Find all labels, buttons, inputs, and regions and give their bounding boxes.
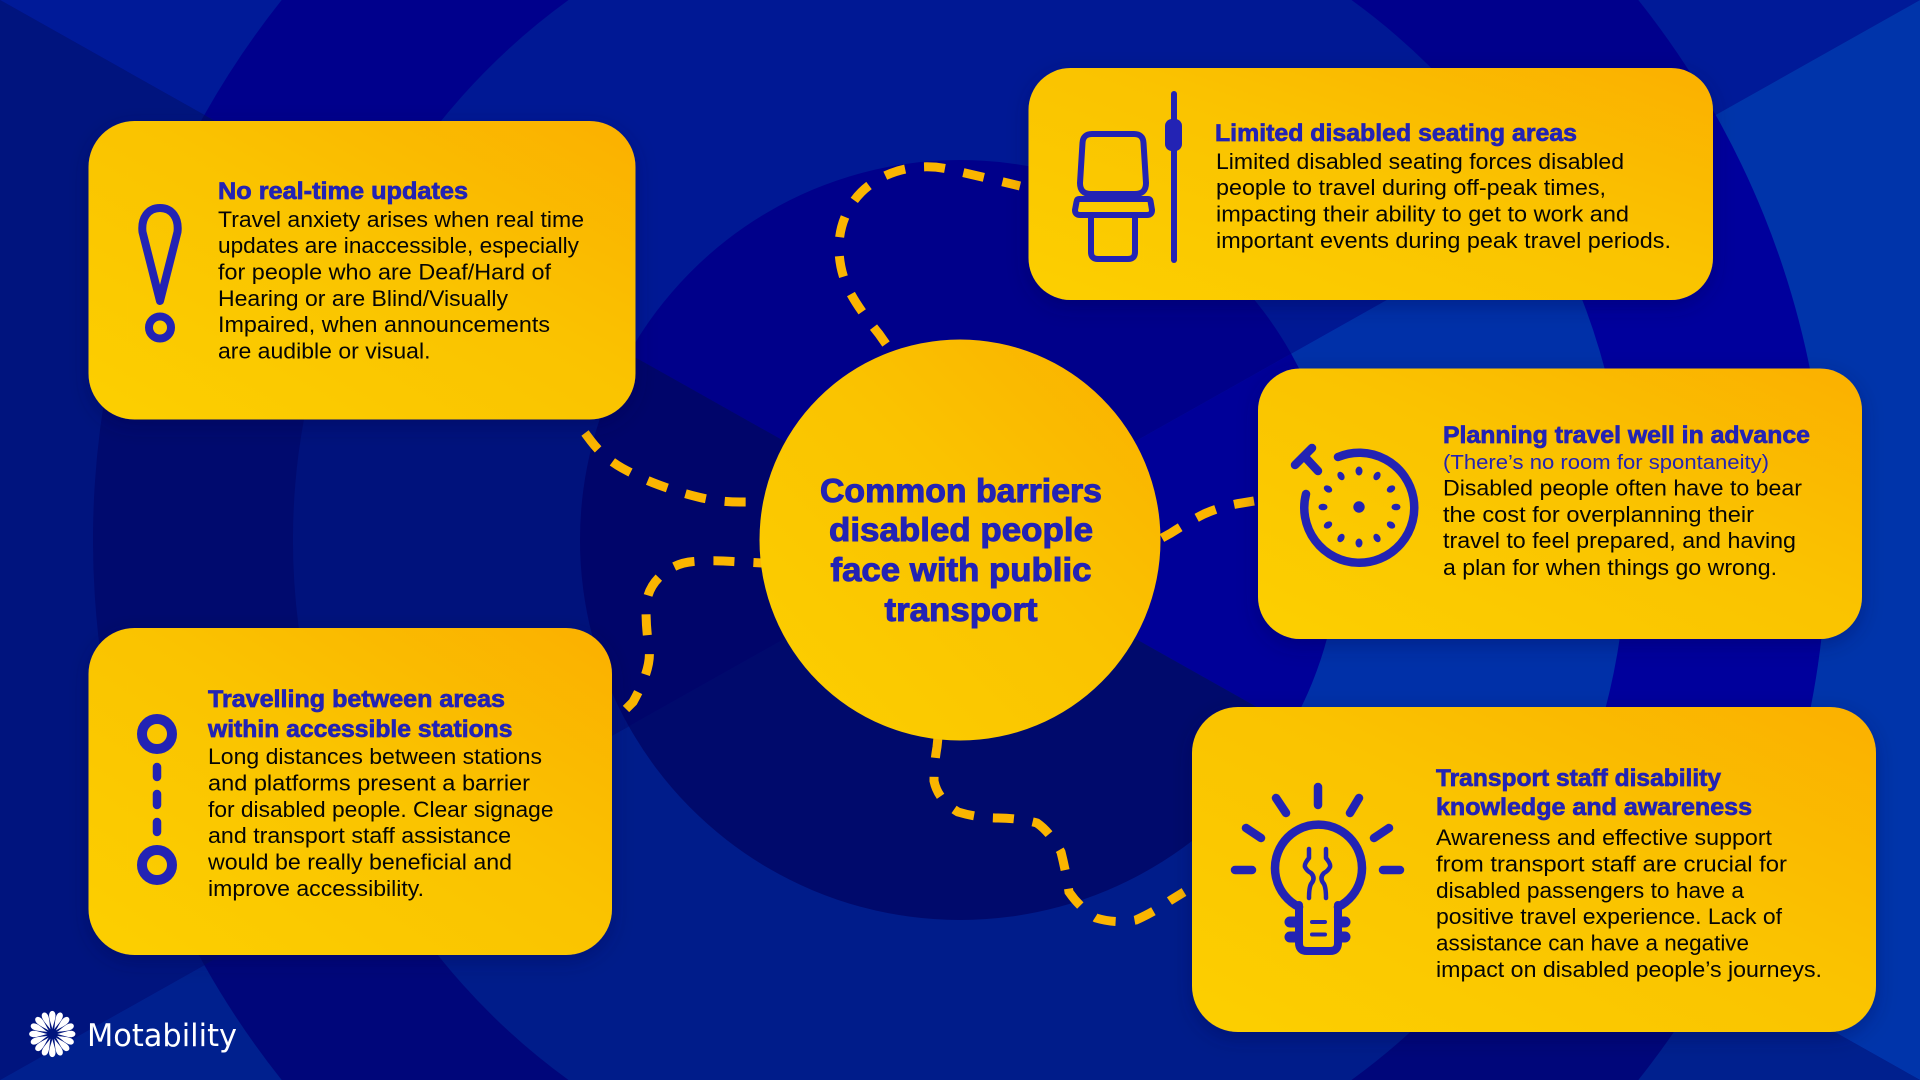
text: stations body: would be really beneficial and [207,850,512,874]
panel: transport staff awareness [1192,707,1876,1032]
text: planning body: a plan for when things go wrong. [1443,555,1777,580]
title: face with public [830,551,1092,588]
icon: flower mark [29,1011,75,1057]
text: seating body: Limited disabled seating forces disabled [1216,149,1624,174]
icon: route with two stops [142,719,172,880]
text: stations body: and platforms present a barrier [208,770,530,796]
text: stations body: Long distances between stations [208,744,542,769]
text: stations body [207,744,554,901]
dashed connector: centre to planning card [1162,501,1254,538]
heading: staff awareness: knowledge and awareness [1436,794,1752,821]
icon: light bulb [1235,787,1400,951]
text: staff body: impact on disabled people’s journeys. [1436,957,1822,982]
text: real-time updates body: for people who are Deaf/Hard of [218,260,552,284]
wordmark: Motability [87,1018,237,1054]
text: seating body: impacting their ability to get to work and [1216,202,1629,226]
text: real-time updates body: Travel anxiety arises when real time [218,207,584,232]
text: real-time updates body: are audible or visual. [218,338,430,364]
panel: no real-time updates [88,121,636,420]
title [820,472,1102,628]
text: real-time updates body: updates are inaccessible, especially [218,233,579,258]
text: stations body: for disabled people. Clear signage [208,797,554,822]
logo: Motability [29,1011,237,1057]
icon: exclamation mark [142,208,178,338]
icon: train seat and pole [1075,94,1182,260]
heading: travelling between areas: Travelling between areas [208,686,505,713]
text: planning body: Disabled people often have to bear [1443,476,1802,500]
text: stations body: and transport staff assistance [208,823,511,848]
panel: planning travel well in advance [1258,368,1862,639]
heading: no real-time updates: No real-time updates [218,178,468,205]
text: seating body: important events during peak travel periods. [1216,228,1671,253]
text: real-time updates body: Impaired, when announcements [218,312,550,337]
text: staff body: disabled passengers to have a [1436,878,1745,903]
central circle: common barriers [760,340,1160,740]
heading: travelling between areas [207,686,512,743]
title: Common barriers [820,472,1102,509]
subheading: spontaneity: (There’s no room for spontaneity) [1443,452,1769,474]
text: staff body: Awareness and effective support [1436,825,1772,850]
text: planning body: the cost for overplanning their [1443,502,1754,527]
dashed connector: centre to stations card [626,561,762,709]
text: planning body [1443,476,1802,580]
text: real-time updates body [218,207,584,364]
heading: staff awareness [1436,765,1752,821]
text: staff body: assistance can have a negative [1436,930,1749,956]
text: real-time updates body: Hearing or are Blind/Visually [218,286,508,311]
text: staff body [1436,825,1822,982]
text: stations body: improve accessibility. [208,876,424,901]
heading: travelling between areas: within accessible stations [207,716,512,743]
text: seating body [1216,149,1671,253]
text: staff body: positive travel experience. Lack of [1436,904,1783,929]
title: transport [884,591,1038,628]
text: planning body: travel to feel prepared, and having [1443,528,1796,553]
heading: planning: Planning travel well in advance [1443,422,1810,449]
heading: limited seating: Limited disabled seating areas [1215,120,1577,147]
panel: travelling between areas [88,628,612,955]
dashed connector: centre to real-time card [585,433,752,502]
text: seating body: people to travel during off-peak times, [1216,175,1606,200]
text: staff body: from transport staff are crucial for [1436,852,1787,876]
panel: limited disabled seating areas [1028,68,1713,300]
heading: staff awareness: Transport staff disability [1436,765,1722,792]
dashed connector: centre to staff card [934,737,1184,922]
title: disabled people [829,511,1093,548]
icon: clock with rewind arrow [1295,448,1414,563]
dashed connector: centre to seating card [839,167,1020,344]
